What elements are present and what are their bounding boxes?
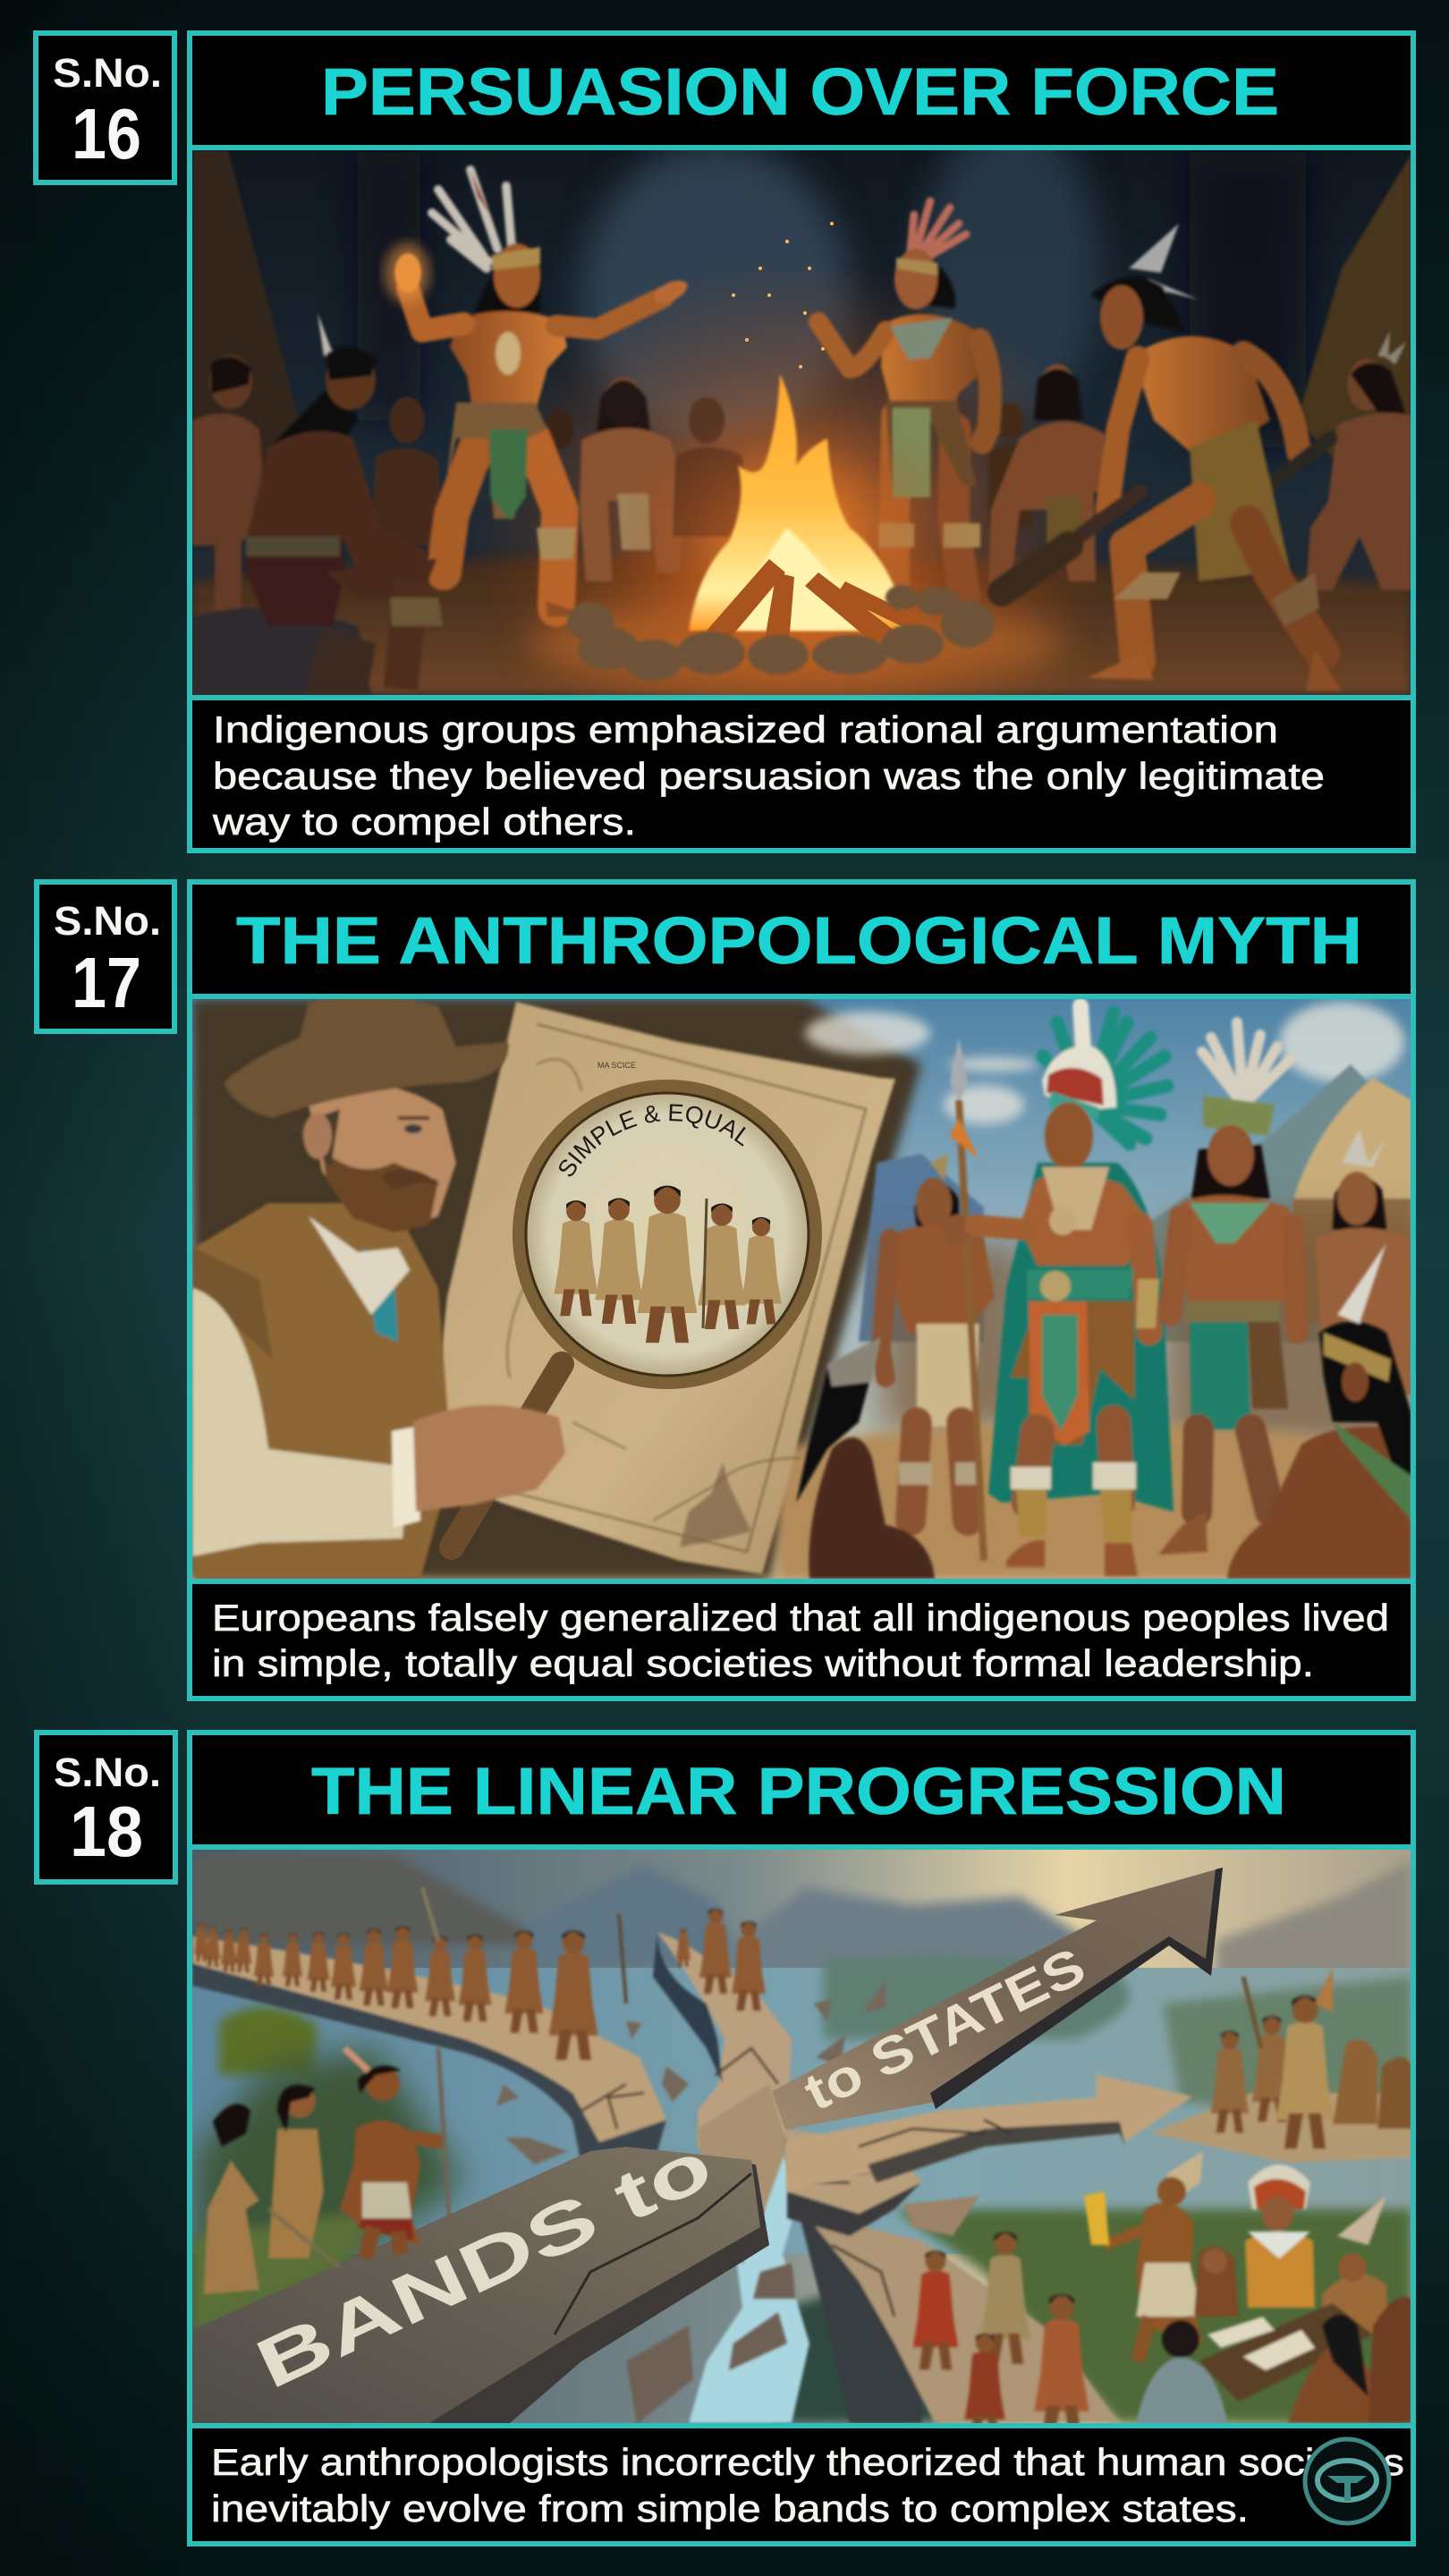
heading: the anthropological myth: [190, 882, 1413, 996]
arrow label: to states: to STATES: [795, 1936, 1094, 2123]
sparks: [732, 222, 834, 369]
illustration: explorer with magnifier and diverse leaders: [192, 999, 1411, 1579]
serial number badge 17: S.No.: [54, 898, 161, 944]
map note: MA SCICE: [597, 1061, 636, 1070]
caption 16: Indigenous groups emphasized rational argumentation: [213, 708, 1278, 750]
serial number badge 16: [36, 33, 174, 182]
caption 16: because they believed persuasion was the only legitimate: [213, 755, 1325, 797]
warrior with clubs: [1002, 224, 1342, 691]
speaker two with headdress: [818, 201, 990, 595]
second chief: [1158, 1022, 1304, 1555]
magnifying glass handle: [452, 1364, 562, 1547]
section 18: the linear progression: [37, 1733, 1413, 2544]
watermark logo: [1305, 2439, 1389, 2523]
second tan arrow: [785, 2074, 1192, 2191]
large upward arrow with label: [772, 1868, 1223, 2130]
illustration: council debate around a fire: [192, 150, 1411, 695]
caption 18: [190, 2426, 1413, 2544]
right standing man: [1315, 1129, 1411, 1395]
caption 17: in simple, totally equal societies without formal leadership.: [212, 1642, 1314, 1684]
seated audience: [192, 331, 1411, 617]
rocks in the water: [626, 2245, 796, 2424]
heading: the anthropological myth: THE ANTHROPOLOGICAL MYTH: [236, 903, 1362, 978]
upper centre path: [653, 1932, 792, 2182]
serial number badge 16: 16: [72, 94, 141, 174]
panel frame 17: [190, 882, 1413, 1699]
caption 18: inevitably evolve from simple bands to complex states.: [211, 2487, 1249, 2529]
section 17: the anthropological myth: [34, 879, 1416, 1701]
lens label: SIMPLE & EQUAL: [559, 1104, 746, 1177]
heading: the linear progression: THE LINEAR PROGRESSION: [311, 1754, 1286, 1828]
magnifying glass lens: [513, 1080, 822, 1389]
flying rock fragments: [496, 1981, 886, 2165]
water rushing through the crack: [689, 2147, 809, 2423]
heading: persuasion over force: [190, 33, 1413, 148]
water and valley: [192, 1968, 1411, 2254]
flames and logs: [635, 374, 943, 640]
serial number badge 17: 17: [72, 943, 141, 1022]
caption 17: Europeans falsely generalized that all indigenous peoples lived: [212, 1597, 1389, 1639]
seated onlookers: [796, 1243, 1411, 1579]
clouds: [805, 1002, 1404, 1124]
caption 17: [190, 1581, 1413, 1699]
village chiefs, children and table: [913, 2151, 1411, 2440]
serial number badge 17: [37, 882, 174, 1031]
tepee left: [192, 150, 299, 468]
ground: [778, 1422, 1411, 1579]
speaker one with raised arms: [384, 170, 691, 617]
foreground slab with label: [192, 2124, 769, 2423]
caption 18: Early anthropologists incorrectly theorized that human societies: [211, 2441, 1404, 2483]
heading: persuasion over force: PERSUASION OVER FORCE: [321, 55, 1279, 129]
five equal figures in lens: [555, 1186, 782, 1343]
lower right broken path: [787, 2129, 1118, 2423]
serial number badge 18: [37, 1733, 175, 1882]
slab label: bands to: BANDS to: [244, 2124, 724, 2403]
chief in teal cape: [975, 1006, 1174, 1576]
panel frame 18: [190, 1733, 1413, 2544]
heading: the linear progression: [190, 1733, 1413, 1847]
mountains and hut: [859, 1064, 1411, 1342]
caption 16: [190, 698, 1413, 851]
ship sketch on map: [680, 1462, 751, 1547]
ledge and people of the state: [1150, 1968, 1411, 2163]
central broken chunks: [698, 2084, 787, 2263]
upper left path: [192, 1936, 666, 2165]
explorer in hat and vest: [192, 996, 565, 1579]
standing man with spear: [881, 1038, 995, 1561]
foreground trio with spear: [204, 2048, 449, 2294]
illustration: broken linear path from bands to states: [192, 1850, 1411, 2440]
seated man seen from behind: [192, 313, 443, 695]
faded map: [429, 1002, 895, 1574]
fire glow: [492, 282, 1077, 695]
marching band of people: [194, 1887, 766, 2060]
caption 16: way to compel others.: [212, 801, 636, 843]
serial number badge 16: S.No.: [53, 50, 162, 96]
serial number badge 18: S.No.: [54, 1750, 161, 1795]
distant crowd: [881, 1216, 1411, 1449]
ring of stones: [567, 585, 995, 681]
tepee right: [1301, 155, 1411, 458]
mountains: [192, 1853, 1411, 2012]
section 16: persuasion over force: [36, 33, 1413, 851]
left trees: [219, 2007, 318, 2075]
panel frame 16: [190, 33, 1413, 851]
serial number badge 18: 18: [70, 1792, 143, 1871]
